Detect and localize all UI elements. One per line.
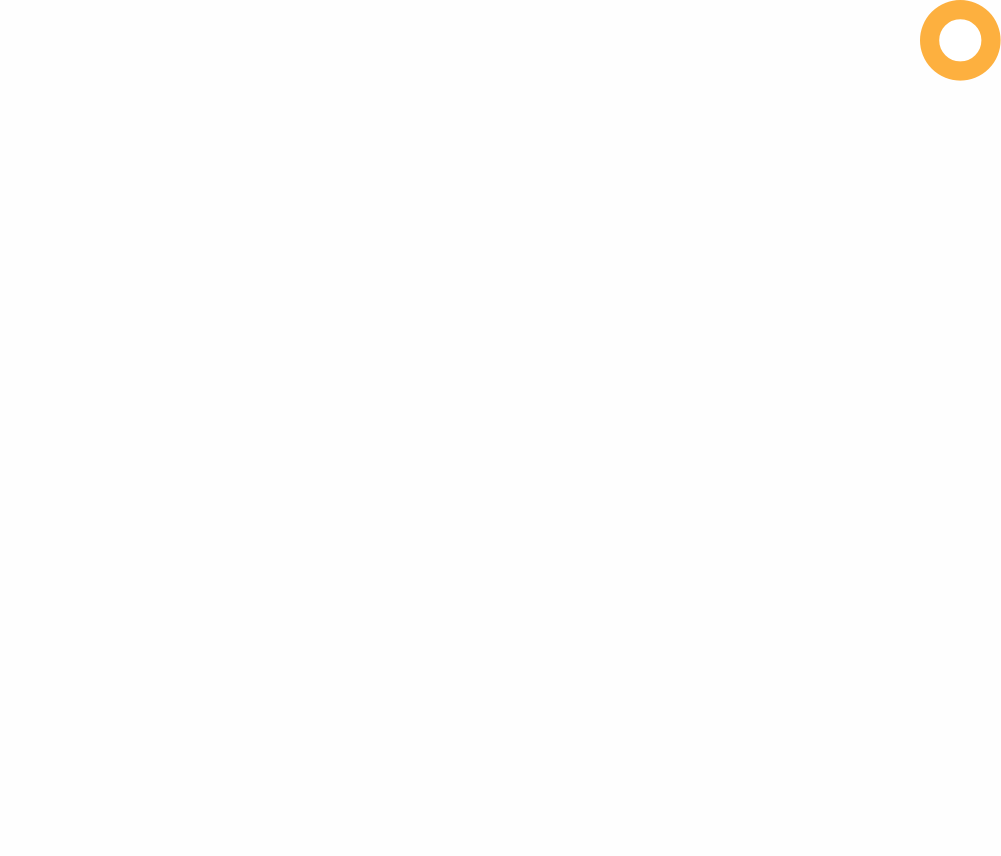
icon: orange ring xyxy=(930,10,991,71)
